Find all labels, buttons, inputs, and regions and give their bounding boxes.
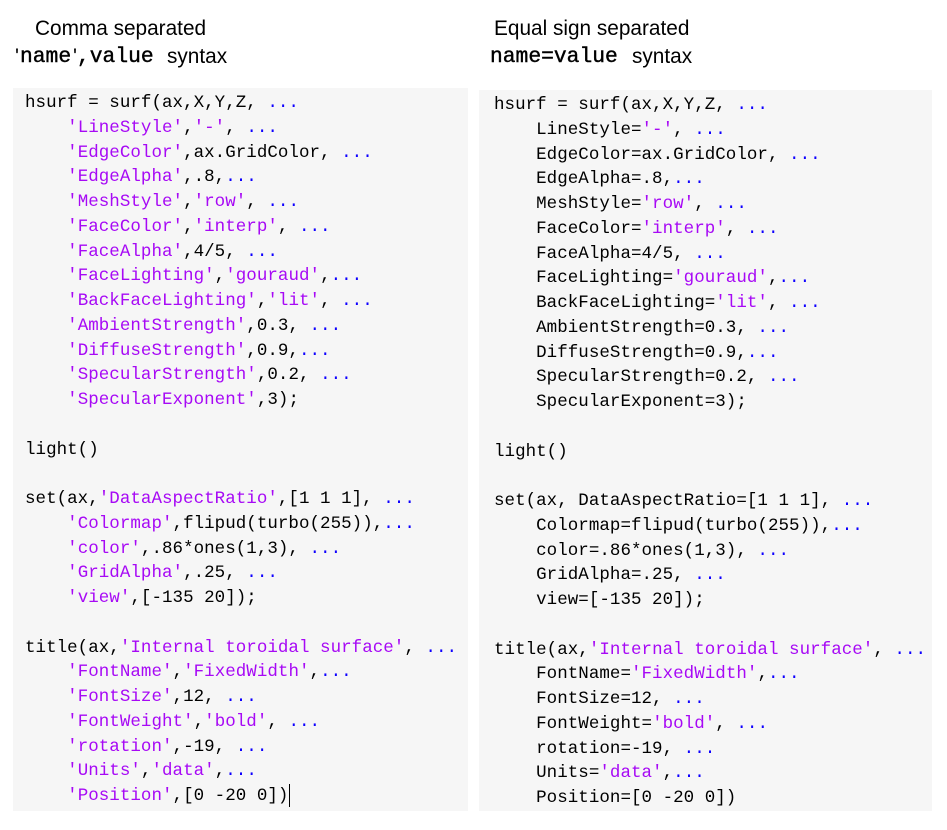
quote after name: ' (73, 45, 77, 68)
word: syntax: syntax (632, 45, 692, 68)
panel: comma separated code (13, 88, 468, 811)
heading line: Equal sign separated: Equal sign separated (494, 17, 689, 40)
text cursor (289, 784, 290, 807)
code term: name=value: name=value (490, 45, 618, 69)
heading: comma separated syntax (15, 17, 227, 69)
quote before name: ' (15, 45, 19, 68)
code block: comma separated: hsurf = surf(ax,X,Y,Z, ... 'LineStyle','-', ... 'EdgeColor',ax.GridColor, ... 'EdgeAlpha',.8,... 'MeshStyle','row', ... 'FaceColor','interp', ... 'FaceAlpha',4/5, ... 'FaceLighting','gouraud',... 'BackFaceLighting','lit', ... 'AmbientStrength',0.3, ... 'DiffuseStrength',0.9,... 'SpecularStrength',0.2, ... 'SpecularExponent',3); light() set(ax,'DataAspectRatio',[1 1 1], ... 'Colormap',flipud(turbo(255)),... 'color',.86*ones(1,3), ... 'GridAlpha',.25, ... 'view',[-135 20]); title(ax,'Internal toroidal surface', ... 'FontName','FixedWidth',... 'FontSize',12, ... 'FontWeight','bold', ... 'rotation',-19, ... 'Units','data',... 'Position',[0 -20 0]) (25, 93, 457, 806)
panel: equal sign separated code (479, 90, 932, 811)
heading line: Comma separated: Comma separated (35, 17, 206, 40)
heading: equal sign separated syntax (490, 17, 692, 69)
code term: name: name (20, 45, 71, 69)
word: syntax: syntax (167, 45, 227, 68)
code term: comma value: ,value (77, 45, 154, 69)
code block: equal sign separated: hsurf = surf(ax,X,Y,Z, ... LineStyle='-', ... EdgeColor=ax.GridColor, ... EdgeAlpha=.8,... MeshStyle='row', ... FaceColor='interp', ... FaceAlpha=4/5, ... FaceLighting='gouraud',... BackFaceLighting='lit', ... AmbientStrength=0.3, ... DiffuseStrength=0.9,... SpecularStrength=0.2, ... SpecularExponent=3); light() set(ax, DataAspectRatio=[1 1 1], ... Colormap=flipud(turbo(255)),... color=.86*ones(1,3), ... GridAlpha=.25, ... view=[-135 20]); title(ax,'Internal toroidal surface', ... FontName='FixedWidth',... FontSize=12, ... FontWeight='bold', ... rotation=-19, ... Units='data',... Position=[0 -20 0]) (494, 95, 926, 808)
